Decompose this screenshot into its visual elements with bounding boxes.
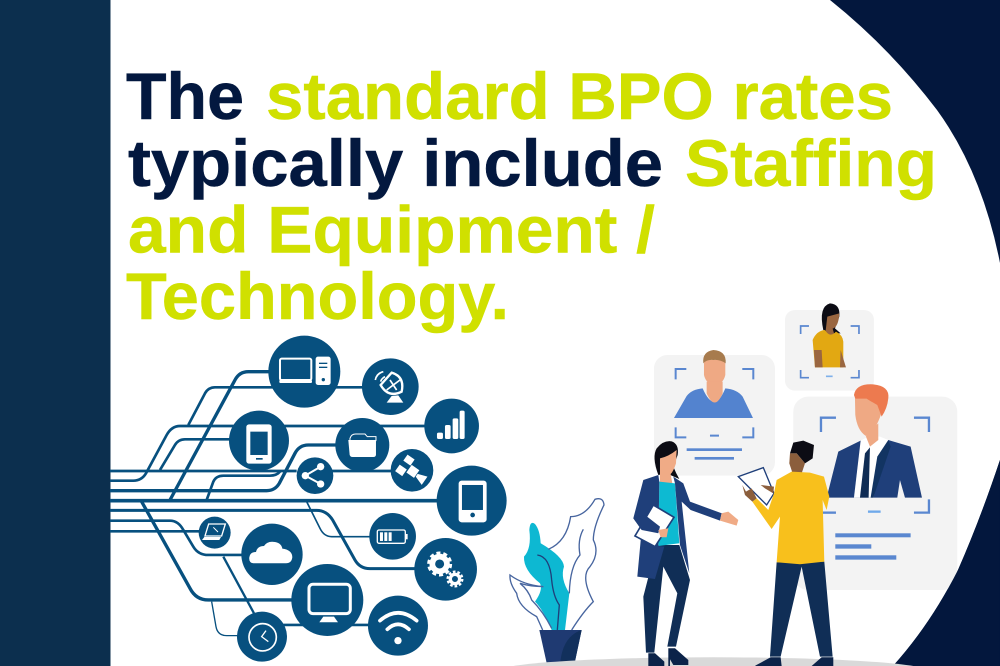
technology network diagram [110,336,507,662]
icon: battery [369,513,416,560]
icon: cloud [241,524,303,585]
title: typically include [128,126,663,200]
icon: share [297,457,333,494]
title: Staffing [685,126,937,200]
icon: monitor [291,564,363,636]
icon: computer [268,336,340,408]
icon: wifi [368,596,428,656]
profile card: man in blue shirt [654,350,775,476]
icon: folder [335,418,389,472]
people and profile cards illustration [500,303,1000,666]
circuit lines [110,372,440,636]
navy edge overlapping card [893,460,1000,666]
icon: gears [414,538,477,601]
title: standard BPO rates [266,59,893,133]
icon: tablet [437,466,507,536]
woman holding tablet [633,441,738,666]
plant in pot [510,499,604,666]
left sidebar band [0,0,110,666]
title [126,59,937,333]
icon: satellite dish [362,358,419,415]
man in yellow sweater with clipboard [738,441,833,666]
icon: satellite [391,449,433,492]
icon: smartphone [229,411,289,471]
navy corner background [500,0,1000,666]
icon: signal bars [424,399,479,453]
profile card: man in suit with text lines [793,384,957,590]
title: and Equipment / [128,192,655,266]
icon: clock [237,612,287,662]
ground shadow [500,657,927,666]
icon: laptop [199,517,231,549]
title: The [126,59,244,133]
title: Technology. [126,259,509,333]
profile card: woman in yellow top [785,303,874,391]
